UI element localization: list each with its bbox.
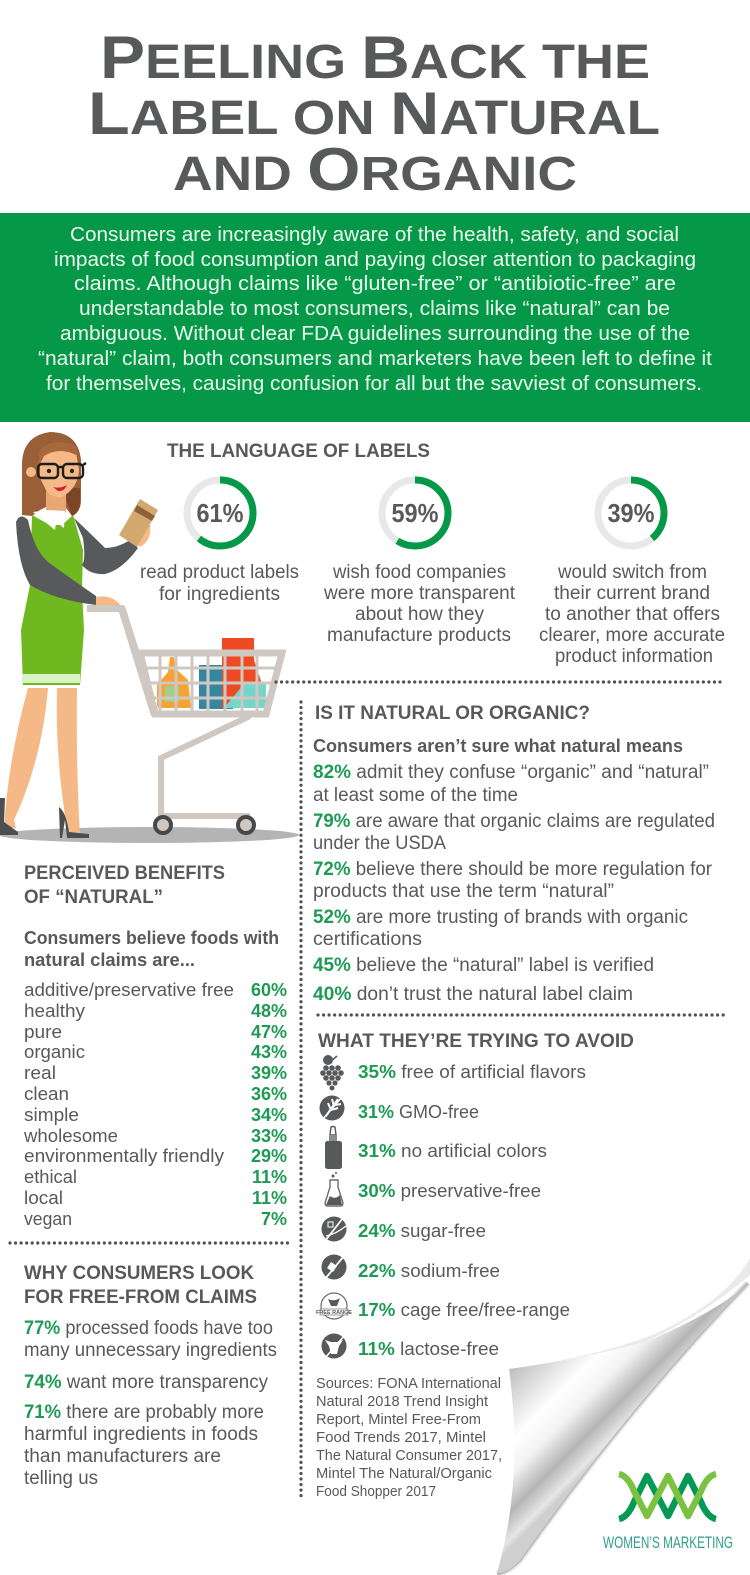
- panel: why consumers look for free-from claims: WHY CONSUMERS LOOK: [24, 1263, 254, 1284]
- panel: perceived benefits: Consumers believe foods with: [24, 928, 279, 948]
- text: sources: Report, Mintel Free-From: [316, 1412, 481, 1428]
- list: avoid items: 17% cage free/free-range: [358, 1299, 570, 1320]
- title: [88, 24, 660, 203]
- panel: is it natural or organic: 40% don’t trust the natural label claim: [313, 984, 633, 1005]
- list: avoid items: [358, 1061, 586, 1359]
- stat: 59%: [323, 480, 516, 646]
- title: PEELING BACK THE: [100, 24, 650, 91]
- stat: 39%: 39%: [608, 498, 654, 528]
- panel: perceived benefits: healthy: [24, 1000, 86, 1021]
- panel: perceived benefits: organic: [24, 1041, 85, 1062]
- title: AND ORGANIC: [173, 136, 577, 203]
- title: LABEL ON NATURAL: [88, 80, 660, 147]
- panel: is it natural or organic: 52% are more trusting of brands with organic: [313, 907, 688, 928]
- panel: perceived benefits: ethical: [24, 1166, 77, 1187]
- list: avoid items: 22% sodium-free: [358, 1260, 500, 1281]
- panel: why consumers look for free-from claims: harmful ingredients in foods: [24, 1424, 258, 1445]
- panel: why consumers look for free-from claims: 71% there are probably more: [24, 1402, 264, 1423]
- panel: perceived benefits: 60%: [251, 980, 287, 1000]
- icon: no sodium: [322, 1254, 346, 1280]
- stat: 59%: were more transparent: [323, 583, 516, 604]
- panel: perceived benefits: 7%: [261, 1209, 287, 1229]
- panel: perceived benefits: additive/preservative free: [24, 979, 234, 1000]
- panel: is it natural or organic: [313, 703, 715, 1005]
- cart: [87, 605, 124, 612]
- logo: women's marketing: [603, 1474, 733, 1552]
- list: avoid items: 31% no artificial colors: [358, 1140, 547, 1161]
- illustration: shopper with cart: [0, 432, 299, 843]
- panel: page curl: [497, 1258, 750, 1574]
- panel: perceived benefits: 33%: [251, 1126, 287, 1146]
- text: sources: Food Trends 2017, Mintel: [316, 1430, 486, 1446]
- panel: perceived benefits: 47%: [251, 1022, 287, 1042]
- panel: why consumers look for free-from claims: 74% want more transparency: [24, 1372, 268, 1393]
- panel: is it natural or organic: 45% believe the “natural” label is verified: [313, 955, 654, 976]
- panel: perceived benefits: vegan: [24, 1208, 72, 1229]
- panel: perceived benefits: PERCEIVED BENEFITS: [24, 863, 225, 884]
- stat: 61%: 61%: [196, 498, 244, 528]
- panel: is it natural or organic: 82% admit they confuse “organic” and “natural”: [313, 762, 709, 783]
- list: avoid items: 24% sugar-free: [358, 1220, 486, 1241]
- panel: perceived benefits: simple: [24, 1104, 79, 1125]
- heading: the language of labels: THE LANGUAGE OF LABELS: [167, 441, 430, 462]
- stat: 59%: 59%: [392, 498, 438, 528]
- icon: free range badge: [316, 1293, 352, 1319]
- panel: intro band: “natural” claim, both consumers and marketers have been left to define it: [38, 348, 712, 370]
- stat: 59%: manufacture products: [327, 625, 511, 646]
- panel: perceived benefits: 34%: [251, 1105, 287, 1125]
- panel: perceived benefits: environmentally friendly: [24, 1145, 225, 1166]
- stat: 59%: wish food companies: [332, 562, 506, 583]
- list: avoid items: 35% free of artificial flavors: [358, 1061, 586, 1082]
- panel: perceived benefits: 39%: [251, 1063, 287, 1083]
- list: avoid items: 11% lactose-free: [358, 1338, 499, 1359]
- panel: is it natural or organic: products that use the term “natural”: [313, 881, 614, 902]
- panel: perceived benefits: clean: [24, 1083, 69, 1104]
- stat: 39%: their current brand: [554, 583, 710, 604]
- stat: 39%: [539, 480, 725, 667]
- stat: 61%: read product labels: [140, 562, 299, 583]
- panel: perceived benefits: wholesome: [23, 1125, 118, 1146]
- text: sources: Natural 2018 Trend Insight: [316, 1394, 488, 1410]
- stat: 39%: to another that offers: [545, 604, 720, 625]
- panel: is it natural or organic: Consumers aren’t sure what natural means: [313, 736, 683, 756]
- stat: 61%: for ingredients: [159, 584, 280, 605]
- list: avoid items: 31% GMO-free: [358, 1101, 479, 1122]
- panel: why consumers look for free-from claims: [24, 1263, 277, 1489]
- panel: why consumers look for free-from claims: FOR FREE-FROM CLAIMS: [24, 1287, 257, 1308]
- package: [119, 499, 158, 547]
- stat: 61%: [140, 480, 299, 605]
- panel: why consumers look for free-from claims: telling us: [24, 1468, 98, 1489]
- panel: perceived benefits: 48%: [251, 1001, 287, 1021]
- panel: why consumers look for free-from claims: 77% processed foods have too: [24, 1318, 273, 1339]
- panel: is it natural or organic: 72% believe there should be more regulation for: [313, 859, 713, 880]
- icon: dye bottle: [325, 1126, 342, 1169]
- text: sources: Sources: FONA International: [316, 1376, 501, 1392]
- panel: is it natural or organic: at least some of the time: [313, 785, 518, 806]
- icon: no sugar: [322, 1216, 346, 1242]
- panel: is it natural or organic: under the USDA: [313, 833, 446, 854]
- text: sources: Food Shopper 2017: [316, 1484, 436, 1500]
- panel: perceived benefits: 11%: [252, 1167, 287, 1187]
- panel: is it natural or organic: certifications: [313, 929, 422, 950]
- stat: 39%: would switch from: [557, 562, 707, 583]
- panel: perceived benefits: 43%: [251, 1042, 287, 1062]
- panel: why consumers look for free-from claims: many unnecessary ingredients: [24, 1340, 277, 1361]
- icon: no GMO: [320, 1096, 344, 1120]
- text: sources: [316, 1376, 502, 1500]
- text: sources: The Natural Consumer 2017,: [316, 1448, 502, 1464]
- panel: why consumers look for free-from claims: than manufacturers are: [24, 1446, 221, 1467]
- panel: perceived benefits: local: [24, 1187, 63, 1208]
- heading: what they're trying to avoid: WHAT THEY’RE TRYING TO AVOID: [318, 1031, 634, 1052]
- panel: intro band: Consumers are increasingly aware of the health, safety, and social: [70, 224, 679, 246]
- dress: [21, 515, 84, 685]
- panel: perceived benefits: 36%: [251, 1084, 287, 1104]
- panel: perceived benefits: [23, 863, 287, 1229]
- panel: perceived benefits: 11%: [252, 1188, 287, 1208]
- panel: perceived benefits: OF “NATURAL”: [24, 887, 163, 908]
- panel: perceived benefits: pure: [24, 1021, 62, 1042]
- panel: intro band: claims. Although claims like “gluten-free” or “antibiotic-free” are: [74, 273, 676, 295]
- panel: intro band: impacts of food consumption and paying closer attention to packaging: [54, 249, 696, 271]
- panel: intro band: [0, 213, 750, 422]
- list: avoid items: 30% preservative-free: [358, 1180, 541, 1201]
- panel: perceived benefits: real: [24, 1062, 56, 1083]
- icon: flask: [325, 1172, 343, 1206]
- icon: free range badge: FREE RANGE: [316, 1310, 352, 1316]
- panel: intro band: ambiguous. Without clear FDA guidelines surrounding the use of the: [60, 323, 690, 345]
- icon: no lactose cow: [322, 1334, 346, 1358]
- text: sources: Mintel The Natural/Organic: [316, 1466, 492, 1482]
- stat: 39%: clearer, more accurate: [539, 625, 725, 646]
- panel: intro band: for themselves, causing confusion for all but the savviest of consumers.: [46, 373, 702, 395]
- panel: is it natural or organic: 79% are aware that organic claims are regulated: [313, 811, 715, 832]
- panel: perceived benefits: 29%: [251, 1146, 287, 1166]
- stat: 59%: about how they: [355, 604, 484, 625]
- panel: intro band: understandable to most consumers, claims like “natural” can be: [79, 298, 670, 320]
- arms: [74, 518, 138, 574]
- stat: 39%: product information: [555, 646, 713, 667]
- icon: grapes: [320, 1055, 344, 1090]
- legs: [4, 688, 48, 828]
- panel: perceived benefits: natural claims are...: [24, 950, 195, 970]
- panel: is it natural or organic: IS IT NATURAL OR ORGANIC?: [315, 703, 590, 724]
